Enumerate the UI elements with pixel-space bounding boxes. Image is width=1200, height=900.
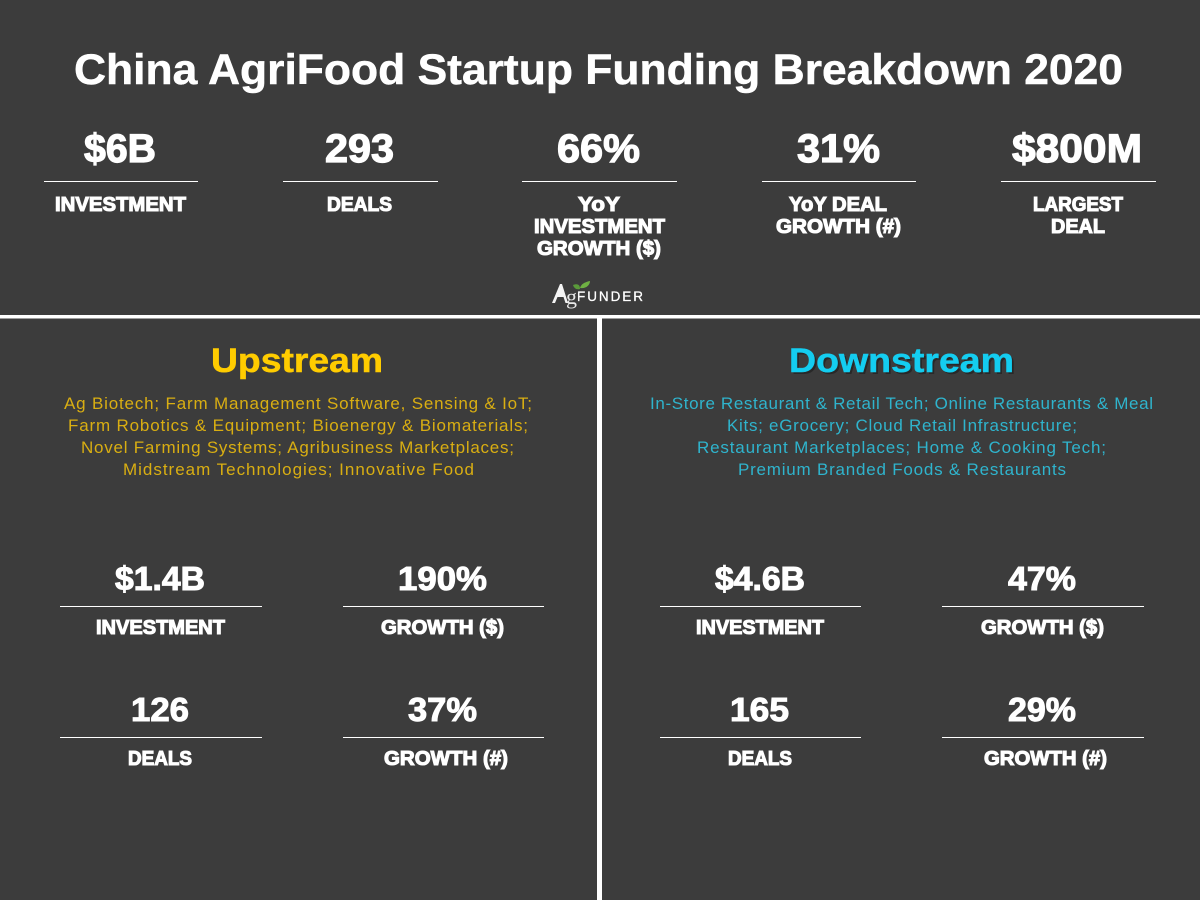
stat: YoY deal growth: 31% — [797, 127, 880, 171]
stat: downstream deal growth: 29% — [1008, 691, 1076, 728]
stat: downstream investment growth: GROWTH ($) — [981, 617, 1104, 639]
text: upstream categories: Ag Biotech; Farm Management Software, Sensing & IoT; — [64, 394, 532, 413]
stat: upstream deals: DEALS — [128, 748, 192, 770]
stat: YoY deal growth: YoY DEAL — [789, 194, 887, 216]
stat: downstream investment growth: 47% — [1008, 560, 1076, 597]
text: upstream categories — [64, 394, 532, 479]
stat: deals: DEALS — [327, 194, 392, 216]
stat: largest deal: LARGEST — [1033, 194, 1123, 216]
stat: upstream deal growth: GROWTH (#) — [384, 748, 508, 770]
stat: investment: INVESTMENT — [55, 194, 186, 216]
stat: deals — [283, 127, 438, 216]
stat: largest deal: $800M — [1012, 127, 1142, 171]
stat: YoY investment growth: 66% — [557, 127, 640, 171]
stat: downstream deals: 165 — [730, 691, 789, 728]
stat: upstream investment — [60, 560, 262, 639]
stat: investment: $6B — [84, 127, 156, 171]
divider: vertical — [597, 318, 602, 900]
stat: downstream deal growth: GROWTH (#) — [984, 748, 1107, 770]
panel: headline stats — [44, 127, 1156, 260]
heading: downstream: Downstream — [789, 342, 1014, 380]
stat: upstream investment growth — [343, 560, 544, 639]
stat: downstream deals — [660, 691, 861, 770]
stat: upstream deal growth — [343, 691, 544, 770]
stat: YoY investment growth: YoY — [578, 194, 621, 216]
stat: upstream deals: 126 — [131, 691, 189, 728]
stat: upstream deal growth: 37% — [408, 691, 477, 728]
heading: downstream: Downstream — [791, 344, 1016, 382]
stat: largest deal — [1001, 127, 1156, 238]
stat: downstream investment: INVESTMENT — [696, 617, 824, 639]
stat: upstream deals — [60, 691, 262, 770]
logo: AgFunder — [552, 281, 643, 309]
text: downstream categories: Premium Branded Foods & Restaurants — [738, 460, 1066, 479]
text: upstream categories: Farm Robotics & Equipment; Bioenergy & Biomaterials; — [68, 416, 528, 435]
panel: upstream — [60, 342, 544, 770]
stat: deals: 293 — [325, 127, 394, 171]
text: downstream categories: Kits; eGrocery; Cloud Retail Infrastructure; — [727, 416, 1077, 435]
stat: largest deal: DEAL — [1051, 216, 1105, 238]
text: downstream categories: Restaurant Marketplaces; Home & Cooking Tech; — [697, 438, 1106, 457]
stat: YoY deal growth — [762, 127, 916, 238]
stat: upstream investment growth: GROWTH ($) — [381, 617, 504, 639]
stat: upstream investment: $1.4B — [115, 560, 205, 597]
divider: horizontal — [0, 315, 1200, 318]
stat: downstream deal growth — [942, 691, 1144, 770]
stat: downstream deals: DEALS — [728, 748, 792, 770]
stat: downstream investment — [660, 560, 861, 639]
stat: investment — [44, 127, 198, 216]
stat: YoY deal growth: GROWTH (#) — [776, 216, 901, 238]
heading: upstream: Upstream — [211, 342, 383, 380]
stat: YoY investment growth: GROWTH ($) — [537, 238, 661, 260]
text: upstream categories: Novel Farming Systems; Agribusiness Marketplaces; — [81, 438, 514, 457]
stat: upstream investment growth: 190% — [398, 560, 487, 597]
title: China AgriFood Startup Funding Breakdown 2020 — [74, 46, 1123, 94]
text: downstream categories: In-Store Restaurant & Retail Tech; Online Restaurants & Meal — [650, 394, 1153, 413]
text: downstream categories — [650, 394, 1153, 479]
stat: YoY investment growth: INVESTMENT — [534, 216, 665, 238]
panel: downstream — [650, 342, 1153, 770]
logo: AgFunder: FUNDER — [577, 289, 643, 304]
logo: AgFunder: g — [566, 284, 577, 309]
text: upstream categories: Midstream Technologies; Innovative Food — [123, 460, 474, 479]
stat: downstream investment: $4.6B — [715, 560, 805, 597]
stat: downstream investment growth — [942, 560, 1144, 639]
stat: upstream investment: INVESTMENT — [96, 617, 225, 639]
stat: YoY investment growth — [522, 127, 677, 260]
